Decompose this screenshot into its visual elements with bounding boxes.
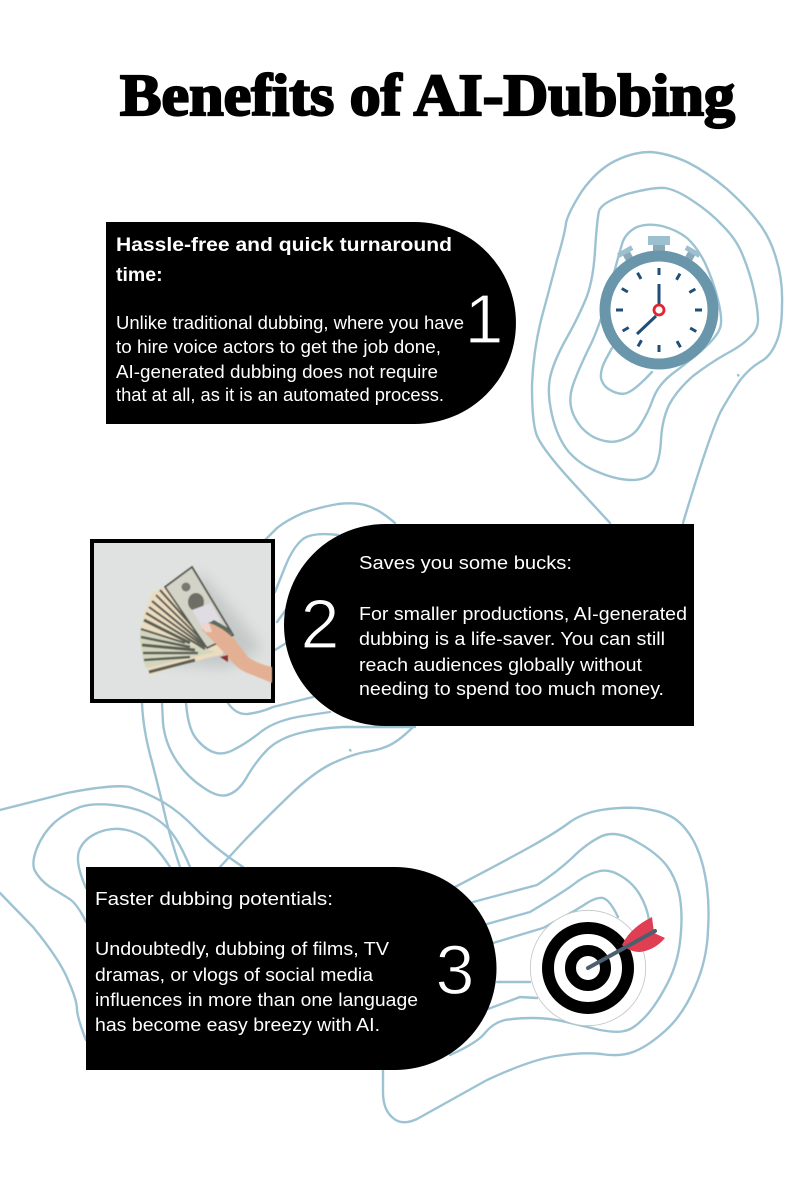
hand	[200, 623, 272, 683]
number 1: 1	[465, 280, 503, 358]
panel: faster dubbing	[86, 867, 496, 1070]
panel 3 body text: influences in more than one language	[95, 990, 418, 1010]
panel 3 body text: Undoubtedly, dubbing of films, TV	[95, 939, 389, 959]
panel 2 body text: needing to spend too much money.	[359, 679, 664, 699]
panel: saves bucks	[284, 524, 694, 726]
panel 2 body text	[359, 604, 687, 699]
contour lines: middle	[142, 503, 415, 867]
panel 1 body text: to hire voice actors to get the job done,	[116, 337, 441, 357]
panel 2 body text: reach audiences globally without	[359, 655, 642, 675]
panel 1 body text: AI-generated dubbing does not require	[116, 362, 438, 382]
panel 1 body text	[116, 313, 464, 405]
panel 1 body text: that at all, as it is an automated process.	[116, 385, 444, 405]
icon: target with arrow	[530, 910, 665, 1026]
panel 2 body text: dubbing is a life-saver. You can still	[359, 629, 665, 649]
contour lines: top right	[532, 152, 782, 523]
number 2: 2	[301, 585, 339, 663]
contour lines: bottom right	[383, 808, 709, 1122]
panel 1 heading: Hassle-free and quick turnaround	[116, 234, 452, 256]
money fan	[140, 567, 233, 675]
panel 3 heading: Faster dubbing potentials:	[95, 889, 333, 909]
panel 2 body text: For smaller productions, AI-generated	[359, 604, 687, 624]
icon: stopwatch	[601, 236, 717, 368]
panel: hassle-free	[106, 222, 516, 424]
panel 3 body text	[95, 939, 418, 1035]
panel 1 body text: Unlike traditional dubbing, where you have	[116, 313, 464, 333]
number 3: 3	[436, 931, 474, 1009]
photo: hand holding dollar bills	[92, 541, 273, 701]
panel 3 body text: has become easy breezy with AI.	[95, 1015, 380, 1035]
panel 3 body text: dramas, or vlogs of social media	[95, 965, 374, 985]
contour lines: bottom left	[0, 786, 243, 1040]
title: Benefits of AI-Dubbing	[120, 62, 735, 128]
panel 2 heading: Saves you some bucks:	[359, 553, 572, 573]
panel 1 heading: time:	[116, 264, 163, 286]
